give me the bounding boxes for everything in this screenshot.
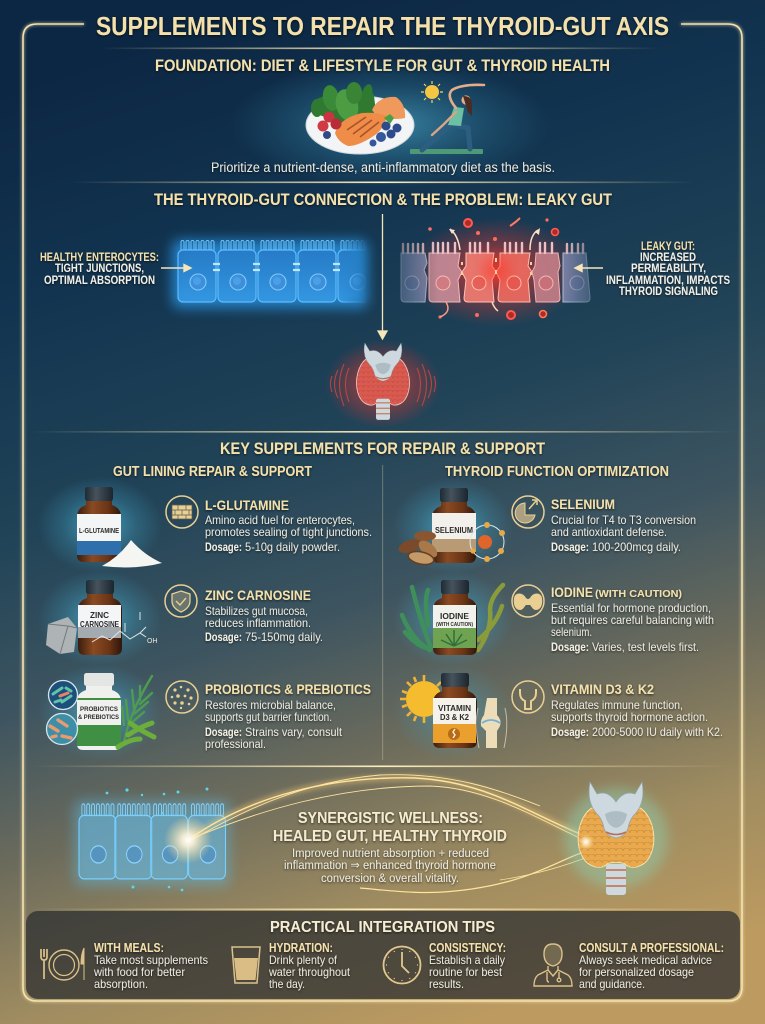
text: vitamin d3 k2: supports thyroid hormone action.	[551, 710, 708, 724]
text: l-glutamine	[205, 497, 372, 554]
text: hydration	[268, 941, 351, 991]
healthy label: TIGHT JUNCTIONS,	[55, 261, 144, 275]
panel: gut lining repair	[38, 464, 372, 760]
bottle: zinc carnosine: CARNOSINE	[80, 620, 120, 629]
sparkle	[164, 816, 212, 864]
text: selenium: Dosage:	[551, 540, 589, 554]
icon: shield	[165, 585, 197, 617]
text: l-glutamine: Dosage:	[205, 540, 242, 554]
text: vitamin d3 k2: Dosage:	[551, 725, 589, 739]
text: zinc carnosine: reduces inflammation.	[205, 616, 311, 630]
icon: brick wall	[166, 496, 198, 528]
text: hydration: Drink plenty of	[269, 953, 338, 967]
icon: enzyme pie	[512, 496, 544, 528]
panel: thyroid-gut connection	[40, 191, 730, 428]
bottle: iodine: IODINE	[440, 612, 470, 621]
text: consult: for personalized dosage	[579, 965, 694, 979]
tips heading: PRACTICAL INTEGRATION TIPS	[270, 919, 495, 936]
text: iodine: selenium.	[551, 625, 592, 639]
text: synergistic wellness: SYNERGISTIC WELLNESS:	[298, 810, 483, 827]
card: l-glutamine	[38, 477, 372, 573]
bottle: zinc carnosine: ZINC	[90, 611, 109, 620]
text: consult: CONSULT A PROFESSIONAL:	[579, 941, 724, 955]
text: probiotics: professional.	[205, 737, 266, 751]
text: probiotics: supports gut barrier function.	[205, 710, 332, 724]
text: probiotics: Dosage:	[205, 725, 242, 739]
arrow: gut to thyroid	[378, 214, 387, 339]
text: l-glutamine: 5-10g daily powder.	[245, 540, 340, 554]
text: l-glutamine: L-GLUTAMINE	[205, 497, 289, 513]
text: with meals: WITH MEALS:	[94, 941, 164, 955]
text: with meals: Take most supplements	[94, 953, 208, 967]
healthy label	[40, 250, 159, 287]
foundation heading: FOUNDATION: DIET & LIFESTYLE FOR GUT & THYROID HEALTH	[155, 57, 610, 75]
golden energy flow	[188, 775, 590, 893]
bottle: iodine	[393, 571, 513, 667]
text: consistency: results.	[429, 977, 464, 991]
text: selenium: and antioxidant defense.	[551, 525, 667, 539]
text: consult: and guidance.	[579, 977, 645, 991]
icon: yoga figure	[410, 85, 484, 154]
text: synergistic wellness: Improved nutrient absorption + reduced	[292, 846, 489, 860]
connection heading: THE THYROID-GUT CONNECTION & THE PROBLEM: LEAKY GUT	[154, 191, 612, 209]
text: selenium: SELENIUM	[551, 496, 615, 512]
text: iodine: Dosage:	[551, 640, 589, 654]
card: vitamin d3 k2	[393, 664, 723, 760]
text: selenium: 100-200mcg daily.	[592, 540, 681, 554]
text: selenium	[551, 496, 696, 554]
icon: clock	[384, 946, 420, 984]
tip: consult a professional	[534, 941, 724, 991]
healthy label: HEALTHY ENTEROCYTES:	[40, 250, 159, 264]
card: selenium	[393, 478, 696, 574]
tip: consistency	[384, 941, 506, 991]
text: with meals	[93, 941, 208, 991]
text: consistency: Establish a daily	[429, 953, 505, 967]
title: SUPPLEMENTS TO REPAIR THE THYROID-GUT AXIS	[96, 13, 669, 41]
bottle: selenium: SELENIUM	[435, 525, 473, 535]
icon: plate of food	[306, 82, 414, 154]
panel: practical integration tips	[26, 911, 740, 999]
column heading: gut: GUT LINING REPAIR & SUPPORT	[113, 464, 312, 480]
text: synergistic wellness: HEALED GUT, HEALTHY THYROID	[273, 828, 507, 845]
foundation glow	[230, 60, 550, 188]
icon: sun	[421, 81, 443, 103]
bottle: vitamin d3 k2	[393, 664, 513, 760]
text: zinc carnosine	[205, 587, 323, 644]
text: with meals: with food for better	[93, 965, 185, 979]
text: iodine	[551, 584, 714, 654]
leaky label: INCREASED	[640, 250, 696, 264]
tip: with meals	[41, 941, 208, 991]
bottle: zinc carnosine	[38, 570, 162, 666]
text: zinc carnosine: ZINC CARNOSINE	[205, 587, 311, 603]
leaky label: PERMEABILITY,	[631, 261, 706, 275]
text: hydration: the day.	[269, 977, 305, 991]
icon: doctor	[534, 944, 572, 986]
text: iodine: (WITH CAUTION)	[595, 588, 682, 600]
leaked particles and arrows	[428, 218, 558, 319]
card: iodine	[393, 571, 714, 667]
icon: y receptor	[512, 681, 544, 713]
text: selenium: Crucial for T4 to T3 conversion	[551, 513, 696, 527]
leaky label	[606, 239, 730, 298]
bottle: probiotics: & PREBIOTICS	[78, 714, 119, 721]
icon: glass of water	[232, 947, 260, 983]
icon: plate and cutlery	[41, 948, 84, 980]
leaky label: THYROID SIGNALING	[619, 284, 718, 298]
text: consistency: routine for best	[429, 965, 503, 979]
leaky gut cells	[401, 218, 590, 326]
text: vitamin d3 k2: VITAMIN D3 & K2	[551, 681, 654, 697]
bottle: vitamin d3 k2: VITAMIN	[438, 704, 471, 713]
bottle: probiotics: PROBIOTICS	[80, 706, 118, 713]
panel: foundation	[155, 57, 610, 188]
text: synergistic wellness	[273, 810, 507, 885]
arrow: leaky label to cells	[575, 264, 603, 272]
healthy enterocytes	[172, 240, 376, 308]
card: probiotics	[38, 664, 371, 760]
text: synergistic wellness: conversion & overall vitality.	[321, 871, 459, 885]
heading: key supplements: KEY SUPPLEMENTS FOR REPAIR & SUPPORT	[220, 440, 545, 458]
icon: thyroid butterfly	[512, 585, 544, 617]
text: vitamin d3 k2: Regulates immune function,	[551, 698, 683, 712]
text: iodine: Essential for hormone production,	[551, 601, 711, 615]
text: consult	[579, 941, 724, 991]
panel: synergistic wellness	[74, 775, 668, 895]
bottle: zinc carnosine: OH	[147, 638, 158, 645]
text: l-glutamine: Amino acid fuel for enterocytes,	[205, 513, 355, 527]
card: zinc carnosine	[38, 570, 323, 666]
text: probiotics: Restores microbial balance,	[205, 698, 336, 712]
text: vitamin d3 k2: 2000-5000 IU daily with K2.	[592, 725, 723, 739]
panel: thyroid function	[393, 464, 723, 760]
icon: healthy thyroid	[564, 782, 668, 895]
bottle: iodine: (WITH CAUTION)	[436, 622, 473, 628]
text: probiotics: PROBIOTICS & PREBIOTICS	[205, 681, 371, 697]
text: zinc carnosine: 75-150mg daily.	[245, 630, 323, 644]
text: with meals: absorption.	[94, 977, 148, 991]
text: zinc carnosine: Stabilizes gut mucosa,	[205, 604, 308, 618]
text: l-glutamine: promotes sealing of tight junctions.	[205, 525, 372, 539]
text: consistency: CONSISTENCY:	[429, 941, 506, 955]
text: synergistic wellness: inflammation ⇒ enhanced thyroid hormone	[284, 858, 496, 872]
foundation caption: Prioritize a nutrient-dense, anti-inflammatory diet as the basis.	[211, 160, 555, 175]
leaky label: INFLAMMATION, IMPACTS	[606, 273, 730, 287]
bottle: vitamin d3 k2: D3 & K2	[440, 713, 470, 722]
text: vitamin d3 k2	[551, 681, 723, 739]
healthy label: OPTIMAL ABSORPTION	[44, 273, 155, 287]
text: consistency	[429, 941, 506, 991]
text: iodine: IODINE	[551, 584, 593, 600]
bottle: selenium	[393, 478, 513, 574]
text: consult: Always seek medical advice	[579, 953, 712, 967]
text: probiotics: Strains vary, consult	[245, 725, 343, 739]
icon: microbes	[166, 681, 198, 713]
healed gut cells	[74, 788, 230, 891]
text: probiotics	[205, 681, 371, 751]
icon: inflamed thyroid	[325, 340, 441, 428]
text: hydration: water throughout	[268, 965, 351, 979]
text: zinc carnosine: Dosage:	[205, 630, 242, 644]
leaky label: LEAKY GUT:	[641, 239, 695, 253]
bottle: l-glutamine	[38, 477, 162, 573]
text: iodine: but requires careful balancing with	[551, 613, 714, 627]
bottle: probiotics	[38, 664, 162, 760]
tip: hydration	[232, 941, 351, 991]
text: hydration: HYDRATION:	[269, 941, 333, 955]
arrow: healthy label to cells	[161, 264, 191, 272]
bottle: l-glutamine: L-GLUTAMINE	[79, 528, 119, 535]
column heading: thyroid: THYROID FUNCTION OPTIMIZATION	[445, 464, 669, 480]
text: iodine: Varies, test levels first.	[592, 640, 699, 654]
